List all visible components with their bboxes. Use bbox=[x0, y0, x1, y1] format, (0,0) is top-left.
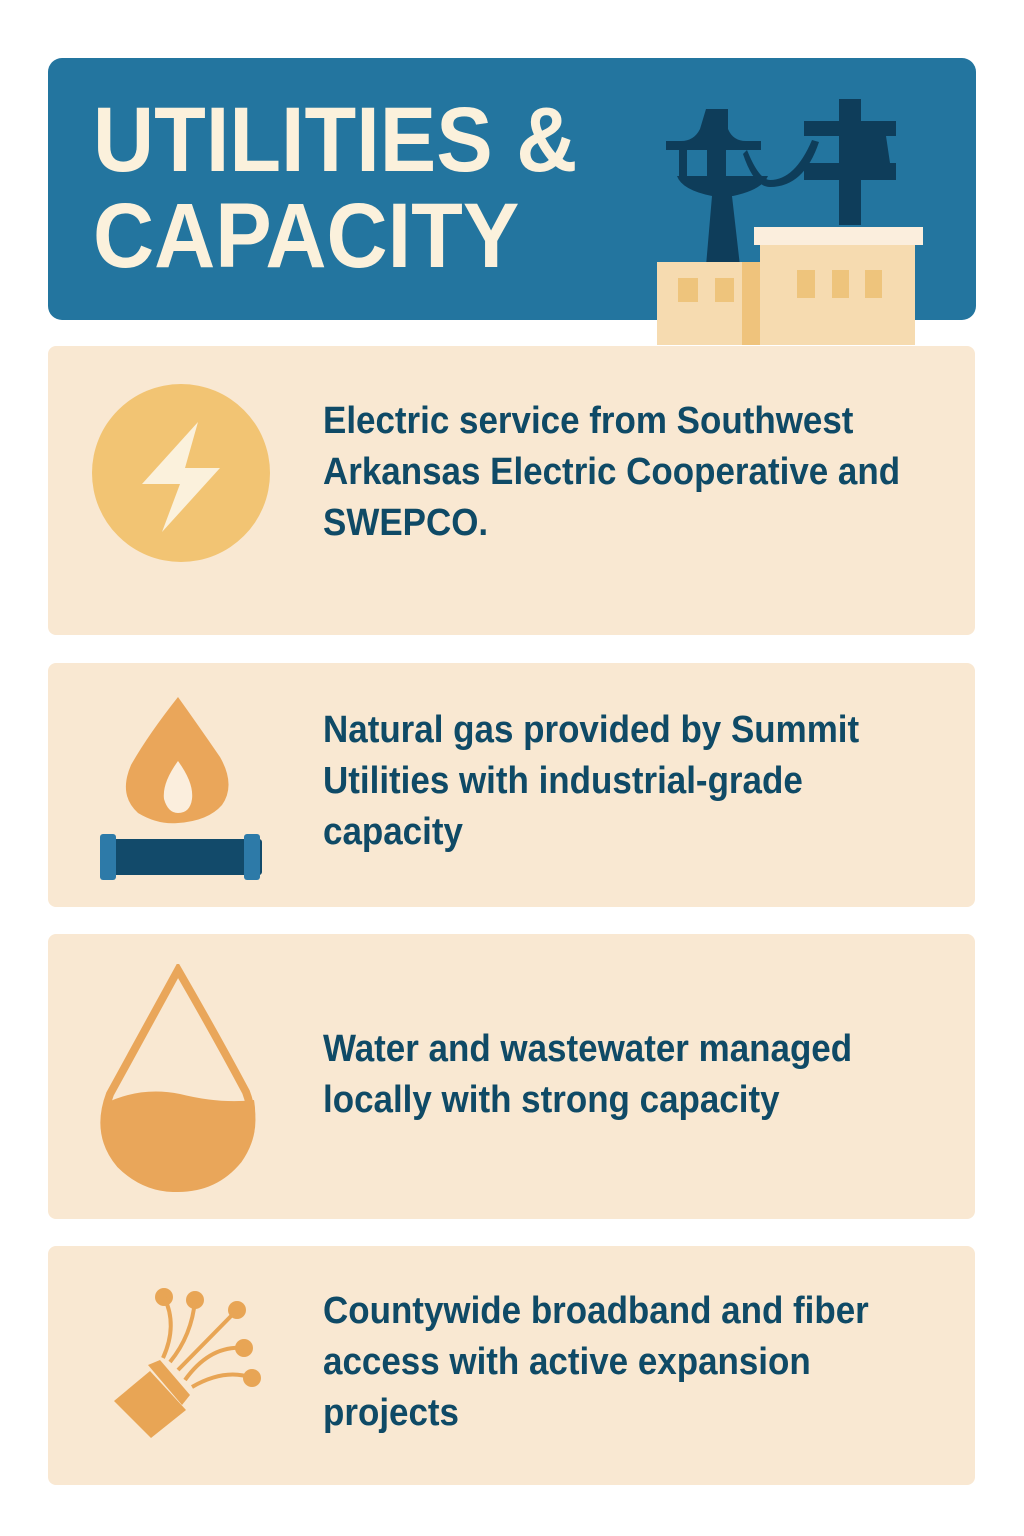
text: broadband bbox=[323, 1290, 869, 1434]
text: gas: capacity bbox=[323, 811, 463, 853]
text: broadband: projects bbox=[323, 1392, 459, 1434]
text: water: locally with strong capacity bbox=[323, 1079, 780, 1121]
panel: electric bbox=[48, 346, 975, 635]
text: gas: Natural gas provided by Summit bbox=[323, 709, 859, 751]
icon: water drop bbox=[100, 964, 256, 1192]
text: broadband: access with active expansion bbox=[323, 1341, 811, 1383]
text: gas: Utilities with industrial-grade bbox=[323, 760, 803, 802]
text: broadband: Countywide broadband and fiber bbox=[323, 1290, 869, 1332]
icon: lightning bbox=[92, 384, 270, 562]
panel: broadband bbox=[48, 1246, 975, 1485]
text: water: Water and wastewater managed bbox=[323, 1028, 852, 1070]
text: electric: Arkansas Electric Cooperative and bbox=[323, 451, 900, 493]
text: electric: Electric service from Southwest bbox=[323, 400, 853, 442]
title: UTILITIES & bbox=[93, 89, 577, 191]
icon: gas flame and pipe bbox=[100, 697, 262, 880]
text: gas bbox=[323, 709, 859, 853]
text: water bbox=[323, 1028, 852, 1121]
title: CAPACITY bbox=[93, 185, 519, 287]
title bbox=[93, 89, 577, 287]
panel: water bbox=[48, 934, 975, 1219]
icon: fiber cable bbox=[114, 1288, 261, 1438]
illustration: power towers and buildings bbox=[657, 99, 923, 345]
text: electric bbox=[323, 400, 900, 544]
header banner bbox=[48, 58, 976, 320]
panel: gas bbox=[48, 663, 975, 907]
text: electric: SWEPCO. bbox=[323, 502, 488, 544]
